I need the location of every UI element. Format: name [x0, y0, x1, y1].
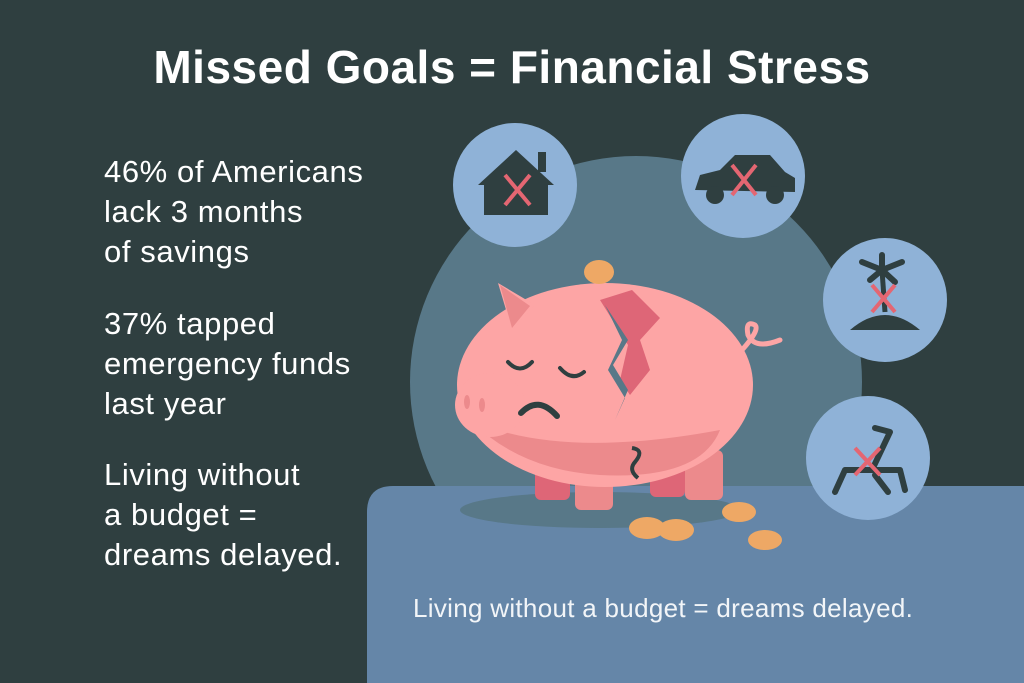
text block: stat 3: a budget =: [104, 497, 257, 532]
text block: stat 2: [104, 306, 351, 421]
text block: stat 1: lack 3 months: [104, 194, 303, 229]
title: Missed Goals = Financial Stress: [153, 41, 871, 93]
platform: [367, 486, 1024, 683]
icon: car: [681, 114, 805, 238]
text block: stat 1: 46% of Americans: [104, 154, 363, 189]
text block: stat 2: last year: [104, 386, 227, 421]
icon: island: [823, 238, 947, 362]
text block: stat 1: [104, 154, 363, 269]
coins: [584, 260, 782, 550]
text block: stat 3: Living without: [104, 457, 300, 492]
background circle: [410, 156, 862, 608]
text block: stat 3: dreams delayed.: [104, 537, 342, 572]
icon: house: [453, 123, 577, 247]
text block: stat 2: 37% tapped: [104, 306, 275, 341]
text block: stat 3: [104, 457, 342, 572]
text block: stat 2: emergency funds: [104, 346, 351, 381]
shadow: [460, 492, 740, 528]
text block: stat 1: of savings: [104, 234, 250, 269]
icon: chair: [806, 396, 930, 520]
piggy bank: [455, 283, 780, 510]
caption: Living without a budget = dreams delayed.: [413, 593, 913, 623]
